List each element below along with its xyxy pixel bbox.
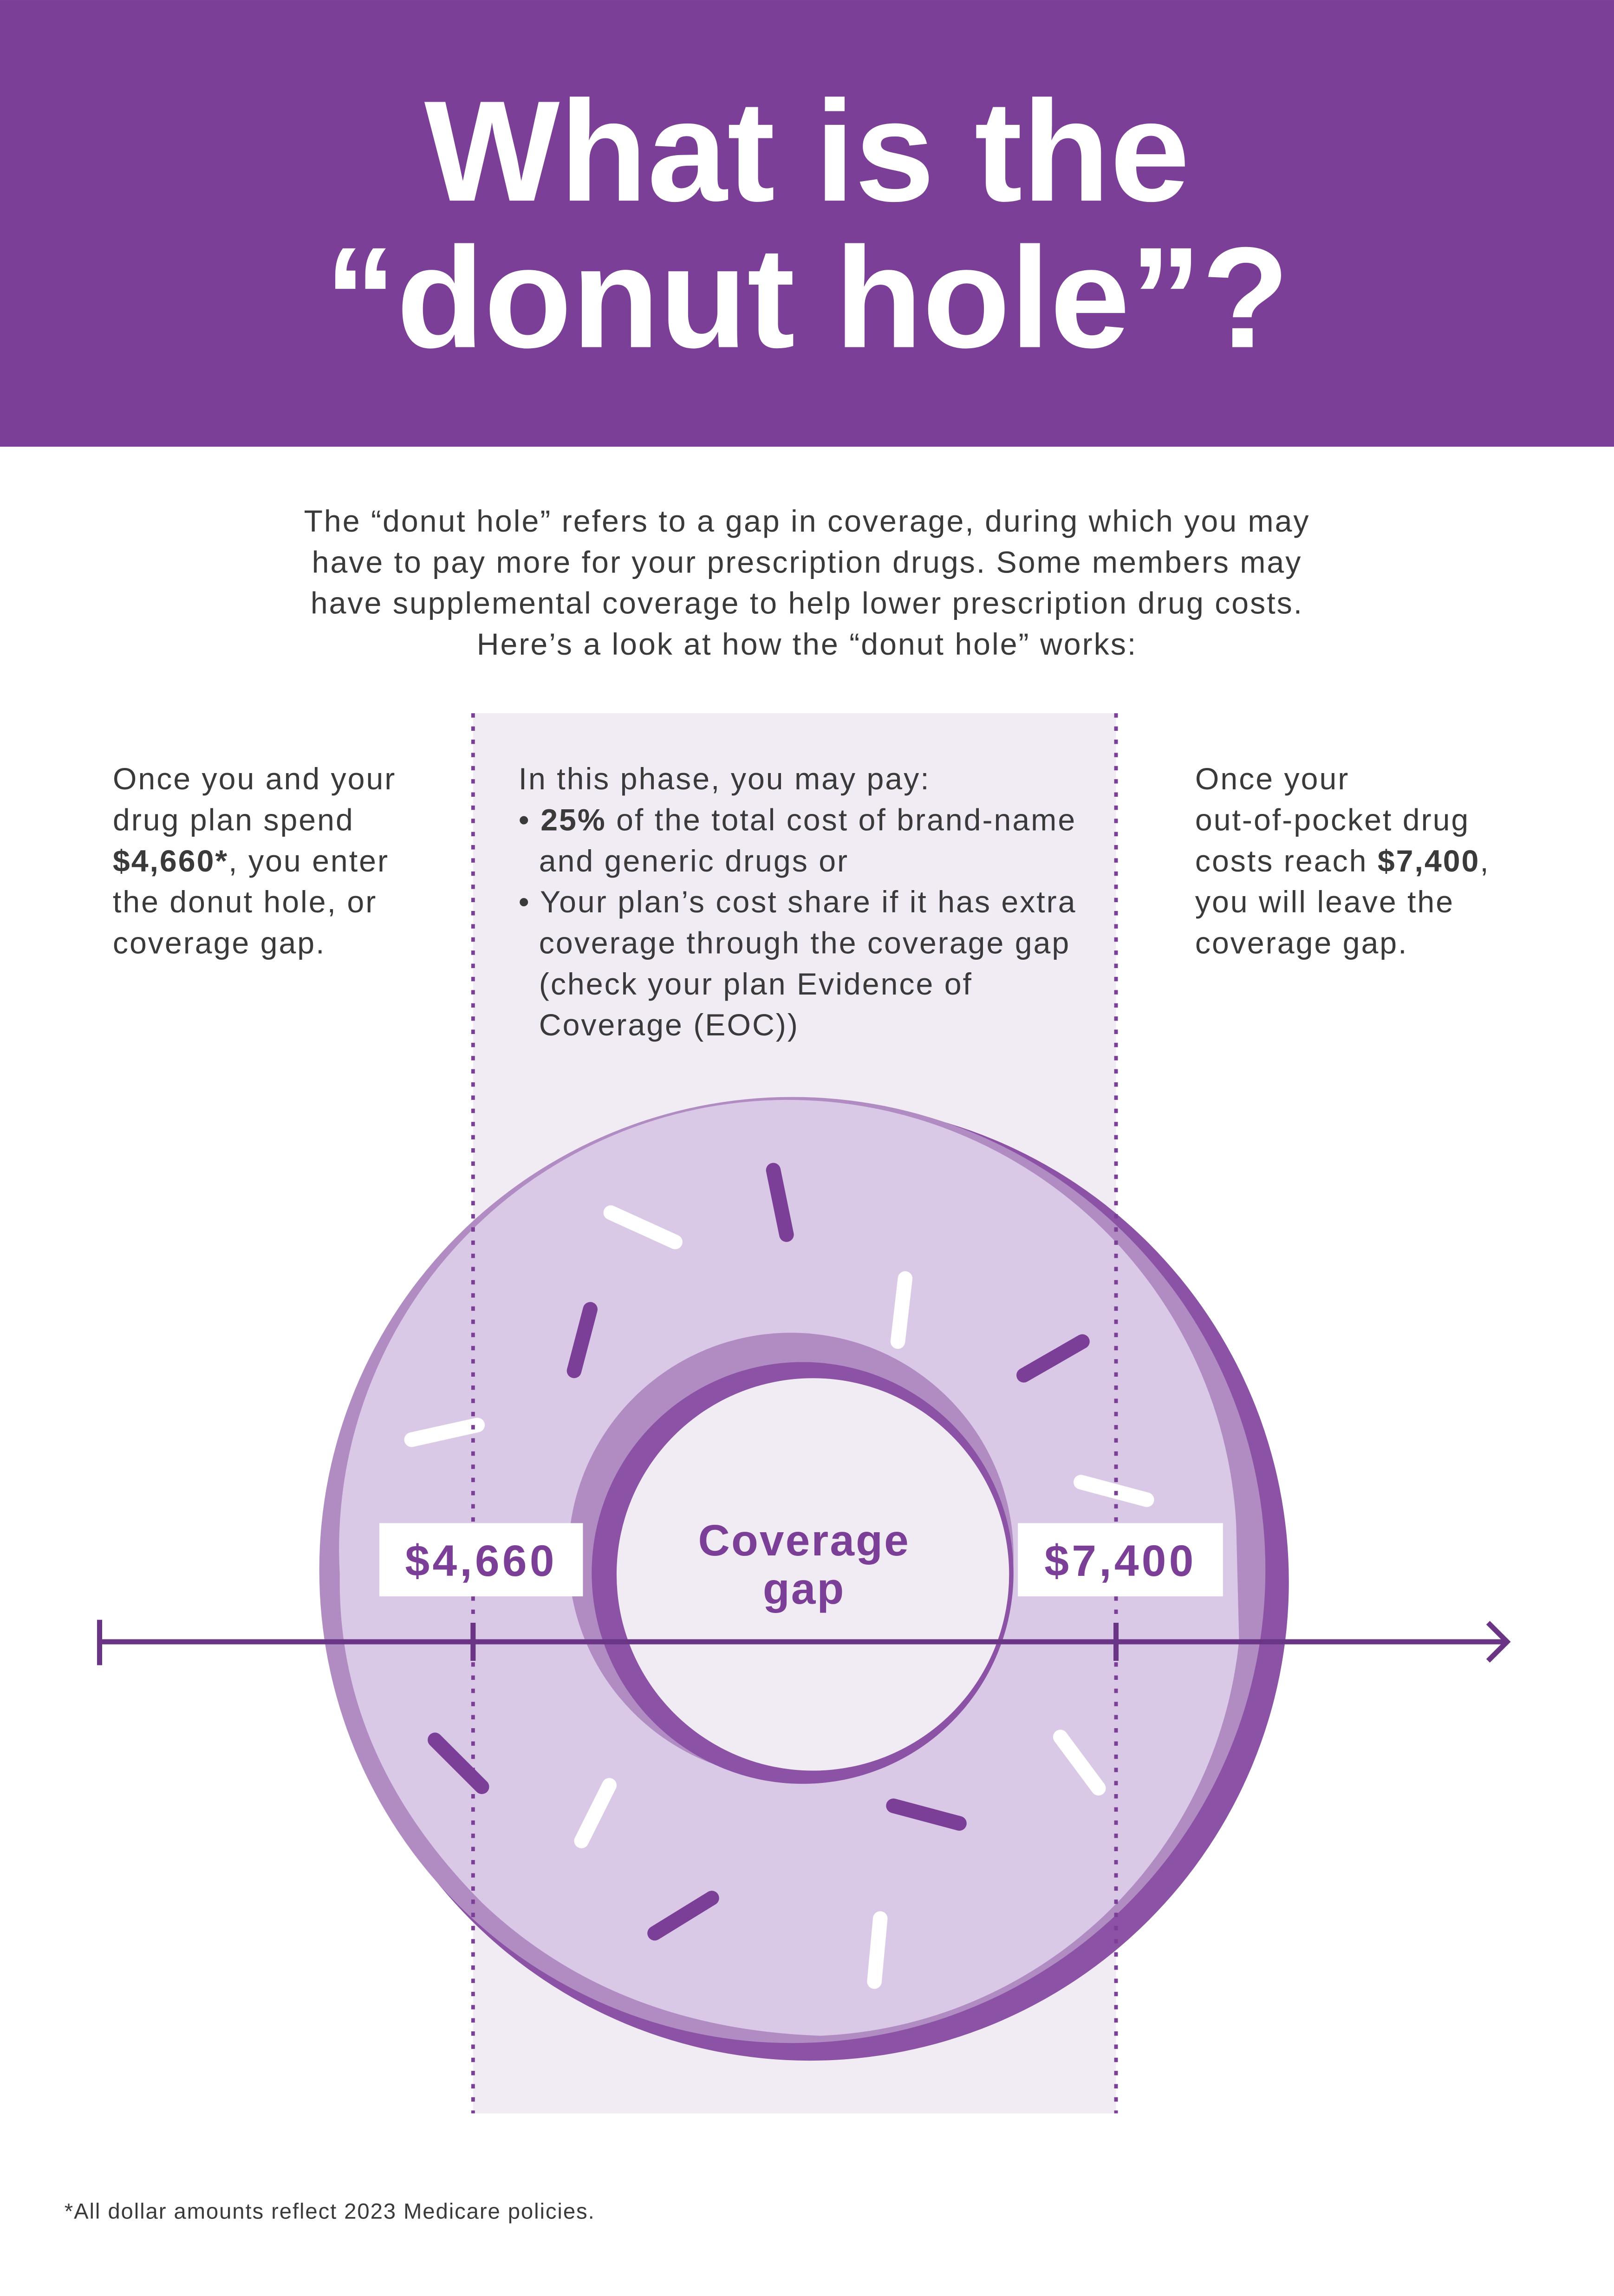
shaded panel: coverage gap phase [473,713,1116,2114]
text: right column: costs reach $7,400, [1195,844,1490,878]
text: middle column: • 25% of the total cost of brand-name [519,803,1076,837]
text: middle column: Coverage (EOC)) [539,1008,799,1042]
text: left column: $4,660*, you enter [113,844,389,878]
label: $4,660 [379,1523,583,1596]
text: middle column: and generic drugs or [539,844,849,878]
text: right column: Once your [1195,762,1349,796]
title: “donut hole”? [325,217,1289,378]
timeline axis arrow [99,1620,1507,1665]
text: middle column [519,762,1077,1042]
text: middle column: (check your plan Evidence of [539,967,973,1002]
intro paragraph: have to pay more for your prescription drugs. Some members may [312,545,1302,579]
text: right column: out-of-pocket drug [1195,803,1470,837]
text: right column: you will leave the [1195,885,1454,919]
donut illustration [319,1097,1289,2061]
text: left column: the donut hole, or [113,885,377,919]
intro paragraph [304,504,1310,662]
label: $7,400 [1018,1523,1223,1596]
text: middle column: coverage through the coverage gap [539,926,1070,960]
dotted boundary lines [473,713,1116,2114]
text: middle column: • Your plan’s cost share if it has extra [519,885,1077,919]
header band [0,0,1614,447]
text: left column: drug plan spend [113,803,354,837]
title [325,71,1289,378]
coverage gap label: Coverage [698,1516,910,1565]
coverage gap label [698,1516,910,1613]
text: right column: coverage gap. [1195,926,1408,960]
label: $4,660: $4,660 [405,1536,557,1586]
sprinkles [411,1170,1147,1982]
title: What is the [424,71,1190,231]
footnote: *All dollar amounts reflect 2023 Medicare policies. [65,2199,595,2224]
intro paragraph: Here’s a look at how the “donut hole” works: [477,627,1137,662]
coverage gap label: gap [763,1564,846,1613]
text: right column [1195,762,1490,960]
text: left column: coverage gap. [113,926,326,960]
text: left column [113,762,396,960]
intro paragraph: have supplemental coverage to help lower prescription drug costs. [311,586,1303,621]
text: left column: Once you and your [113,762,396,796]
intro paragraph: The “donut hole” refers to a gap in coverage, during which you may [304,504,1310,539]
text: middle column: In this phase, you may pay: [519,762,931,796]
label: $7,400: $7,400 [1044,1536,1197,1586]
